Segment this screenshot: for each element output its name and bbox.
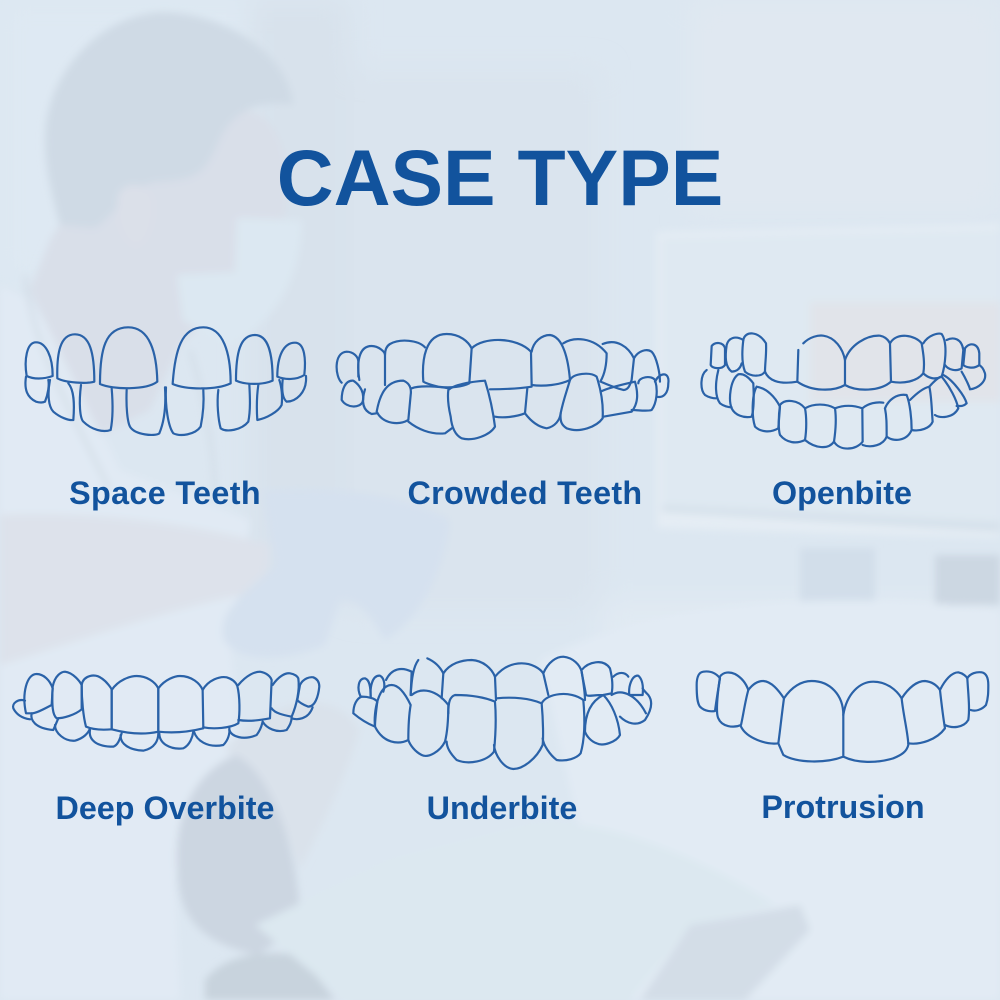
stethoscope	[25, 275, 215, 500]
teeth: crowded teeth	[337, 334, 668, 439]
shadow lower right	[640, 905, 810, 1000]
forearm	[0, 514, 270, 665]
title: CASE TYPE	[277, 134, 723, 222]
monitor frame	[657, 224, 1000, 538]
patient head	[225, 702, 360, 870]
teeth: openbite	[701, 333, 985, 449]
counter	[540, 600, 1000, 1000]
patient hair	[177, 755, 300, 955]
label: protrusion: Protrusion	[761, 789, 925, 825]
drape	[255, 823, 775, 1000]
man's white coat	[0, 285, 250, 1000]
teeth: underbite	[353, 657, 651, 769]
teeth: protrusion	[697, 671, 988, 762]
monitor screen	[662, 230, 1000, 522]
label: space teeth: Space Teeth	[69, 475, 261, 511]
label: crowded teeth: Crowded Teeth	[408, 475, 642, 511]
gloves	[223, 489, 450, 658]
ear	[117, 185, 153, 245]
man's neck and face	[30, 110, 287, 435]
dark lower garment	[205, 953, 335, 1000]
man's hair	[45, 12, 293, 228]
monitor base shadows	[800, 548, 875, 603]
label: underbite: Underbite	[427, 790, 577, 826]
mask	[177, 218, 302, 345]
teeth: deep overbite	[13, 672, 319, 751]
label: deep overbite: Deep Overbite	[56, 790, 274, 826]
label: openbite: Openbite	[772, 475, 912, 511]
teeth: space teeth	[25, 327, 306, 435]
